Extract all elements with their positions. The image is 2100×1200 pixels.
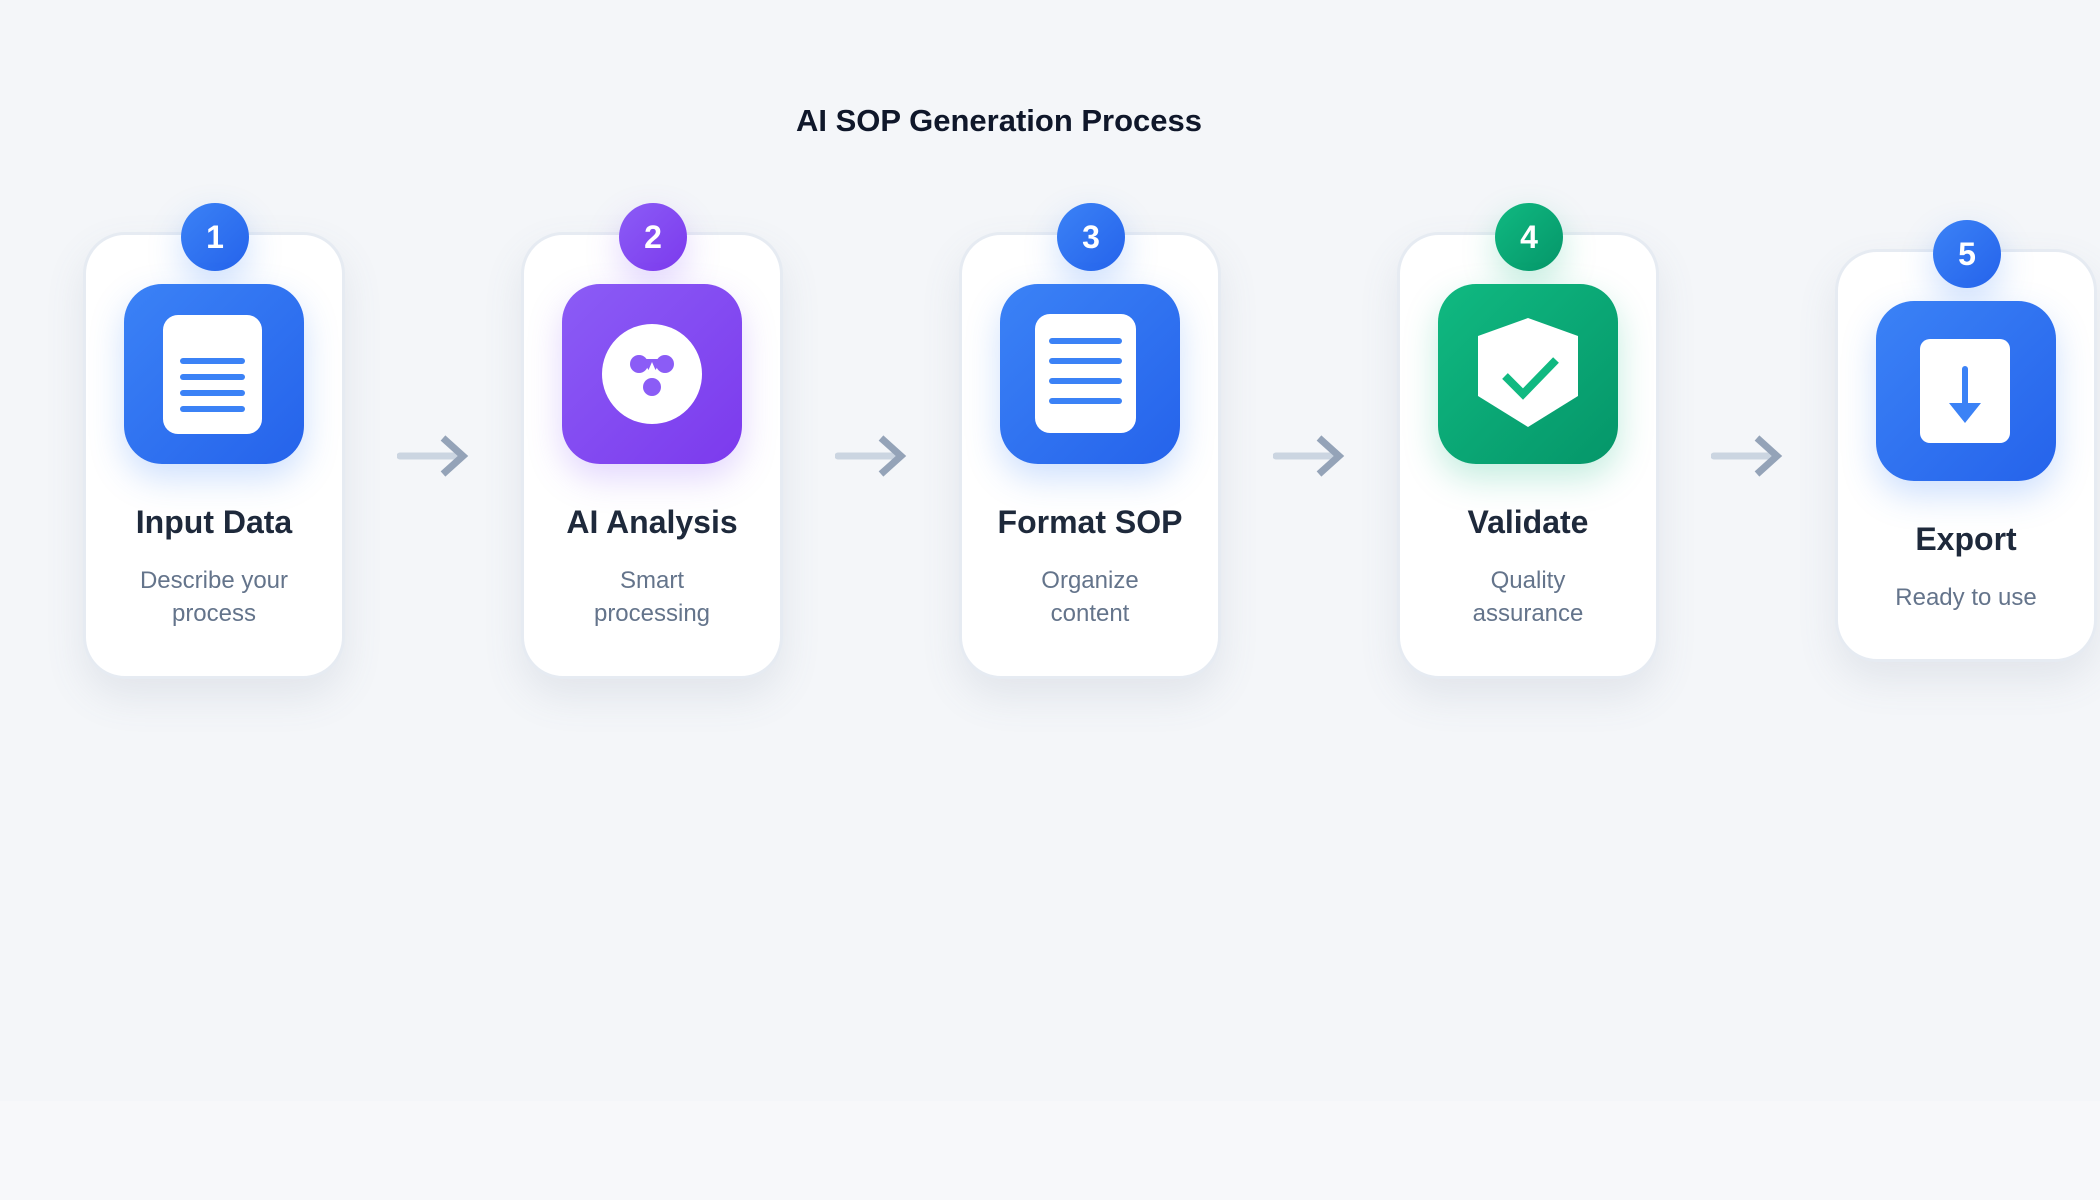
description: Smart (620, 567, 684, 594)
panel: step 4 validate (1397, 232, 1659, 679)
arrow 3 (1273, 436, 1344, 476)
icon: download (1876, 301, 2056, 481)
description: process (172, 600, 256, 627)
badge 3: 3 (1082, 219, 1100, 255)
description (140, 567, 288, 627)
description: Quality (1491, 567, 1565, 594)
arrow 1 (397, 436, 468, 476)
description (1473, 567, 1583, 627)
heading: Validate (1468, 504, 1588, 540)
description: Ready to use (1895, 584, 2037, 611)
badge 2 (619, 203, 687, 271)
description (1041, 567, 1139, 627)
heading: Export (1915, 521, 2017, 557)
description: assurance (1473, 600, 1583, 627)
icon: formatted document (1000, 284, 1180, 464)
panel: step 2 AI analysis (521, 232, 783, 679)
badge 4: 4 (1520, 219, 1538, 255)
description: content (1051, 600, 1129, 627)
icon: shield check (1438, 284, 1618, 464)
badge 5 (1933, 220, 2001, 288)
badge 4 (1495, 203, 1563, 271)
heading: Format SOP (998, 504, 1182, 540)
heading: Input Data (136, 504, 292, 540)
heading: AI Analysis (566, 504, 738, 540)
badge 1: 1 (206, 219, 224, 255)
panel: step 5 export (1835, 249, 2097, 662)
badge 1 (181, 203, 249, 271)
title: AI SOP Generation Process (796, 103, 1202, 138)
description: Organize (1041, 567, 1139, 594)
arrow 2 (835, 436, 906, 476)
badge 5: 5 (1958, 236, 1976, 272)
icon: document (124, 284, 304, 464)
arrow 4 (1711, 436, 1782, 476)
description (594, 567, 710, 627)
icon: AI face (562, 284, 742, 464)
badge 3 (1057, 203, 1125, 271)
badge 2: 2 (644, 219, 662, 255)
description: processing (594, 600, 710, 627)
panel: step 1 input data (83, 232, 345, 679)
description: Describe your (140, 567, 288, 594)
panel: step 3 format SOP (959, 232, 1221, 679)
